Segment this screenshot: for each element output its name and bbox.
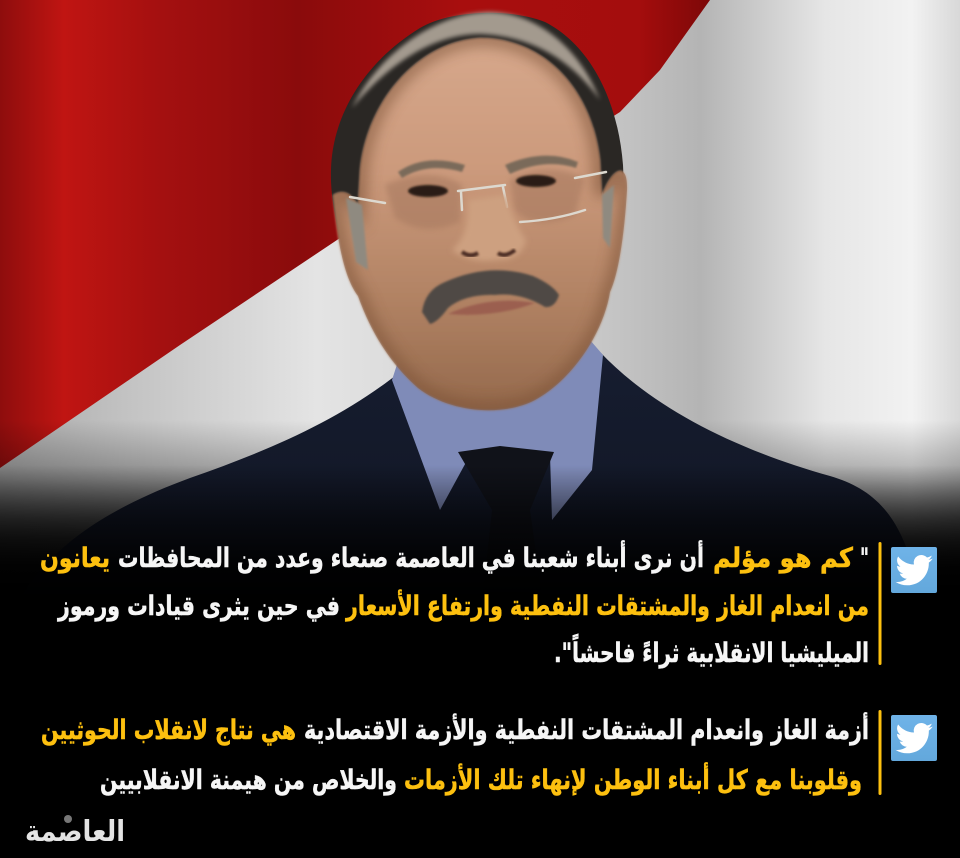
line 2: والخلاص من هيمنة الانقلابيين <box>100 765 397 796</box>
lips <box>448 301 535 315</box>
necktie <box>458 446 554 640</box>
line 1: يعانون <box>40 543 110 574</box>
eye shadows <box>385 175 462 229</box>
quote block 2 <box>41 710 937 796</box>
line 1: هي نتاج لانقلاب الحوثيين <box>41 715 296 746</box>
face edge shading <box>333 38 627 410</box>
divider bar 2 <box>878 710 882 795</box>
line 2 <box>56 589 869 622</box>
line 1: كم هو مؤلم <box>713 543 853 574</box>
portrait <box>72 9 906 547</box>
head hair <box>331 13 623 270</box>
gray hair top <box>352 12 600 108</box>
nose <box>452 195 526 261</box>
glasses <box>350 172 606 222</box>
lower fade over suit <box>0 465 960 600</box>
mustache <box>422 270 559 324</box>
eyebrows <box>398 160 465 178</box>
line 2: في حين يثرى قيادات ورموز <box>56 591 340 622</box>
line 1 <box>41 712 869 746</box>
shirt collar <box>392 340 603 520</box>
side hair <box>346 198 368 270</box>
logo: العاصمة <box>25 814 125 848</box>
quote block 1 <box>40 540 937 669</box>
line 1: " <box>860 543 869 574</box>
background fade <box>0 420 960 600</box>
eyes <box>408 185 448 197</box>
twitter icon 2 <box>891 715 937 761</box>
line 2 <box>100 762 862 796</box>
divider bar 1 <box>878 542 882 665</box>
dark bottom panel <box>0 600 960 858</box>
twitter icon 1 <box>891 547 937 593</box>
face <box>333 38 627 410</box>
suit <box>0 352 925 858</box>
line 1: أن نرى أبناء شعبنا في العاصمة صنعاء وعدد من المحافظات <box>118 540 704 574</box>
